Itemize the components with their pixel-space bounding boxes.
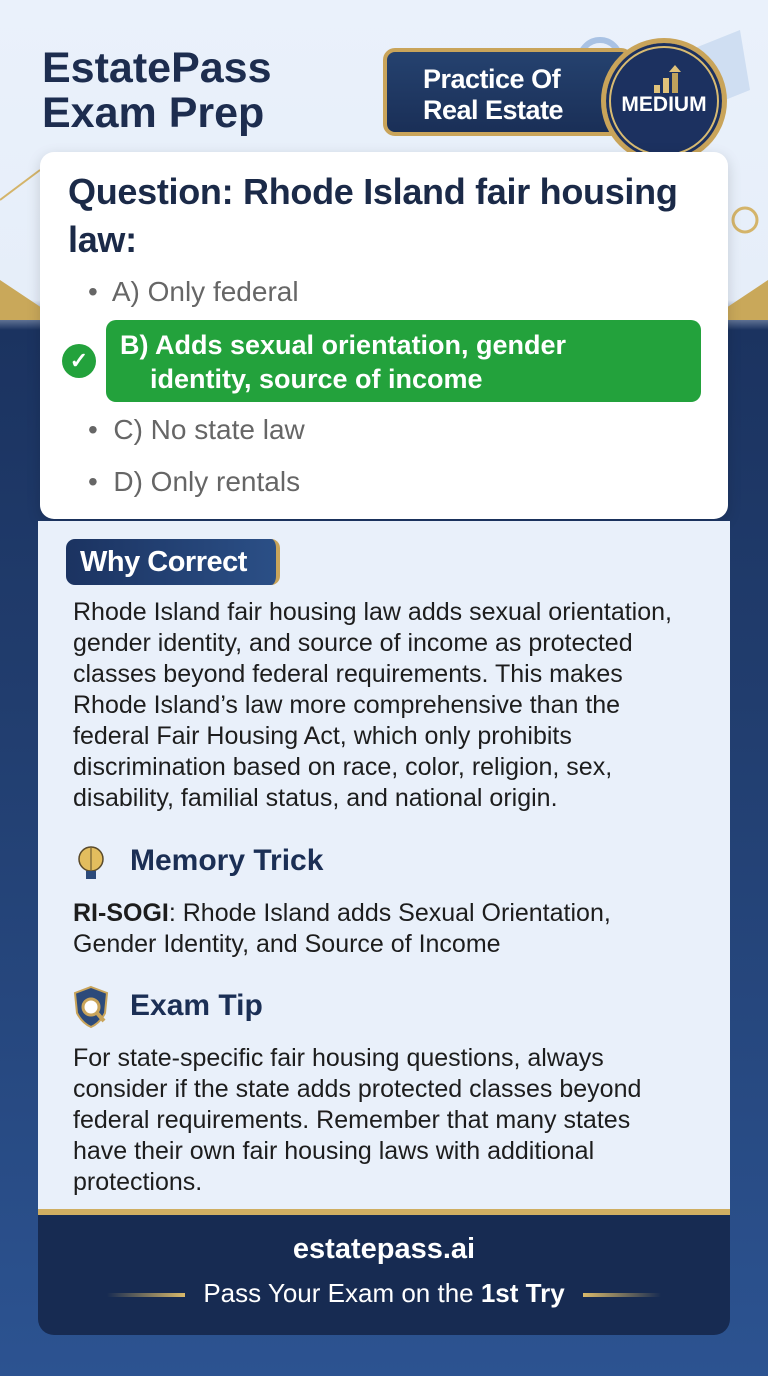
option C: • C) No state law xyxy=(88,414,305,445)
exam tip text: For state-specific fair housing questions, always xyxy=(73,1044,604,1072)
option B correct xyxy=(106,320,701,402)
category pill: Real Estate xyxy=(423,95,563,125)
exam tip text: federal requirements. Remember that many states xyxy=(73,1106,630,1134)
icon: check: ✓ xyxy=(70,348,88,373)
title xyxy=(42,44,272,137)
category pill: Practice Of xyxy=(423,64,560,94)
icon: shield magnifier xyxy=(74,986,108,1028)
why correct text: Rhode Island’s law more comprehensive than the xyxy=(73,691,620,719)
footer url: estatepass.ai xyxy=(293,1233,475,1265)
difficulty medallion xyxy=(601,38,727,164)
category pill xyxy=(383,48,633,136)
why correct text: Rhode Island fair housing law adds sexual orientation, xyxy=(73,598,672,626)
title: EstatePass xyxy=(42,44,272,92)
why correct text: discrimination based on race, color, religion, sex, xyxy=(73,753,612,781)
exam tip text: protections. xyxy=(73,1168,202,1196)
option B correct: identity, source of income xyxy=(150,364,483,394)
memory trick text xyxy=(73,899,611,958)
memory trick text: RI-SOGI: Rhode Island adds Sexual Orientation, xyxy=(73,899,611,927)
why correct badge: Why Correct xyxy=(80,546,247,578)
why correct text: disability, familial status, and national origin. xyxy=(73,784,558,812)
exam tip heading: Exam Tip xyxy=(130,989,263,1022)
exam tip text: consider if the state adds protected classes beyond xyxy=(73,1075,641,1103)
option B correct: B) Adds sexual orientation, gender xyxy=(120,330,566,360)
footer xyxy=(38,1209,730,1335)
why correct badge xyxy=(66,539,280,585)
exam tip text xyxy=(73,1044,641,1196)
badge: category and difficulty xyxy=(383,38,727,152)
icon: brain bulb xyxy=(78,846,104,879)
option A: • A) Only federal xyxy=(88,276,299,307)
why correct text: federal Fair Housing Act, which only prohibits xyxy=(73,722,572,750)
exam tip text: have their own fair housing laws with additional xyxy=(73,1137,594,1165)
question text: Question: Rhode Island fair housing xyxy=(68,171,678,212)
why correct text: gender identity, and source of income as protected xyxy=(73,629,633,657)
explanation panel xyxy=(38,521,730,1213)
difficulty medallion: MEDIUM xyxy=(621,93,707,116)
memory trick text: Gender Identity, and Source of Income xyxy=(73,930,501,958)
footer tagline xyxy=(110,1278,658,1308)
question text xyxy=(68,171,678,260)
why correct text: classes beyond federal requirements. This makes xyxy=(73,660,623,688)
question card xyxy=(40,152,728,519)
icon: check xyxy=(62,344,96,378)
footer tagline: Pass Your Exam on the 1st Try xyxy=(203,1278,565,1308)
option D: • D) Only rentals xyxy=(88,466,300,497)
memory trick heading: Memory Trick xyxy=(130,844,323,877)
why correct text xyxy=(73,598,672,812)
title: Exam Prep xyxy=(42,89,264,137)
question text: law: xyxy=(68,219,137,260)
